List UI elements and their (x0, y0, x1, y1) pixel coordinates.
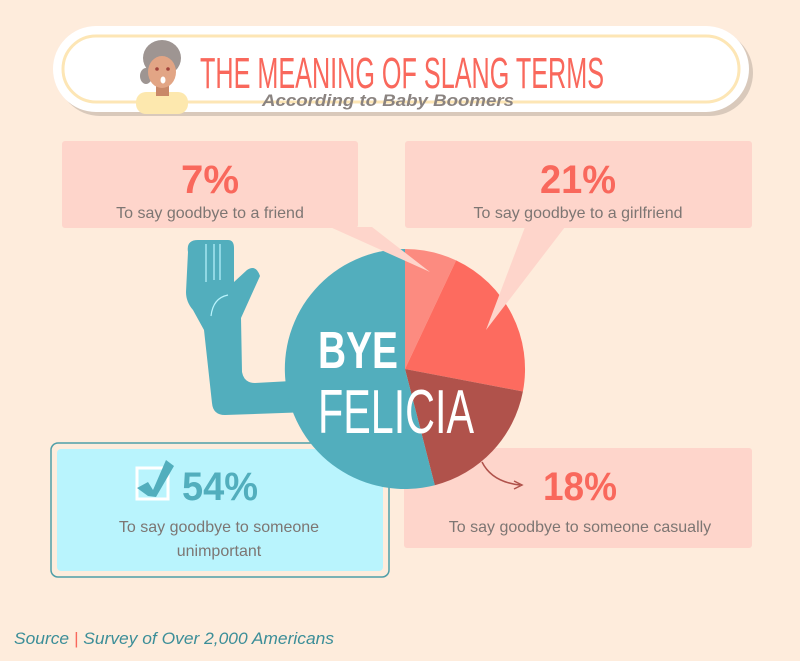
panel: 7% (62, 141, 358, 228)
pie label: BYE FELICIA: BYE (318, 322, 398, 380)
callout pointer: 21% (486, 227, 565, 330)
panel: 7%: 7% (181, 158, 239, 202)
icon: waving arm (186, 240, 310, 415)
pie label: BYE FELICIA (318, 322, 474, 447)
panel: 21%: 21% (540, 158, 616, 202)
panel: 54%: To say goodbye to someone (119, 519, 319, 536)
icon: grandma (136, 40, 188, 114)
icon: checkbox (137, 460, 174, 499)
panel: 54%: unimportant (177, 543, 262, 560)
callout pointer: 7% (330, 227, 430, 272)
pie chart (285, 249, 525, 489)
pie label: BYE FELICIA: FELICIA (318, 378, 474, 447)
panel: 7%: To say goodbye to a friend (116, 205, 304, 222)
panel: 18%: 18% (543, 465, 617, 509)
header banner (53, 26, 753, 116)
arrow: to 18% (482, 462, 522, 489)
panel: 54% (51, 443, 389, 577)
panel: 18% (404, 448, 752, 548)
source: Source | Survey of Over 2,000 Americans (14, 629, 334, 648)
panel: 21% (405, 141, 752, 228)
subtitle: According to Baby Boomers (261, 91, 514, 110)
panel: 54%: 54% (182, 465, 258, 509)
panel: 21%: To say goodbye to a girlfriend (473, 205, 683, 222)
panel: 18%: To say goodbye to someone casually (449, 519, 711, 536)
